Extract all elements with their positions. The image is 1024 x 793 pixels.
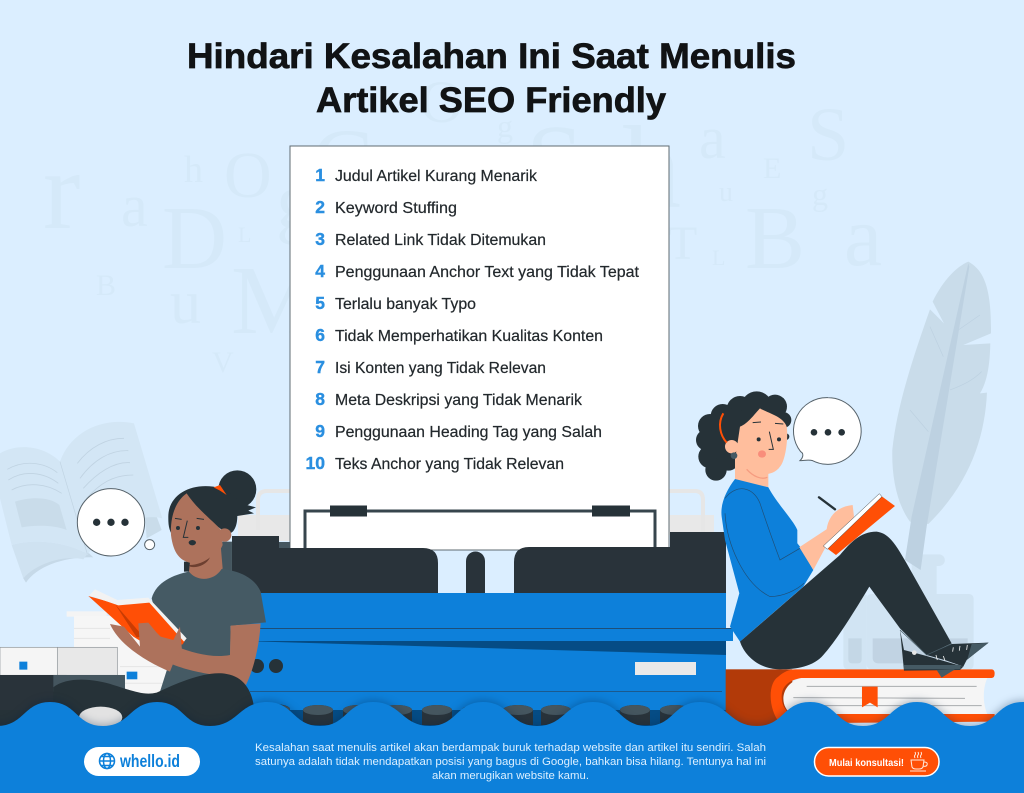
list item 7: Isi Konten yang Tidak Relevan	[335, 360, 546, 377]
hair tie	[720, 413, 727, 443]
sock	[79, 707, 122, 728]
faded serif letters: u	[170, 269, 201, 337]
footer paragraph: satunya adalah tidak mendapatkan posisi yang bagus di Google, bahkan bisa hilang. Tentunya hal ini	[255, 756, 766, 768]
face	[735, 408, 787, 474]
icon: globe	[100, 754, 114, 768]
faded serif letters: S	[526, 104, 584, 219]
list item 2: 2	[315, 197, 325, 217]
shirt	[152, 569, 266, 692]
paper panel with list	[290, 146, 669, 550]
title: Hindari Kesalahan Ini Saat Menulis	[187, 37, 796, 76]
right woman writing	[696, 391, 895, 642]
list item 3: 3	[315, 229, 325, 249]
list item 9: Penggunaan Heading Tag yang Salah	[335, 424, 602, 441]
background feather	[892, 262, 991, 570]
right woman legs and shoes	[740, 532, 989, 678]
faded serif letters: g	[276, 158, 316, 246]
list item 6: 6	[315, 325, 325, 345]
papers and books stack left	[0, 611, 169, 728]
faded serif letters: B	[745, 189, 805, 288]
list item 9: 9	[315, 421, 325, 441]
faded serif letters: S	[807, 93, 849, 177]
book stack under right woman	[726, 669, 995, 726]
keys band	[250, 710, 726, 732]
list item 1: Judul Artikel Kurang Menarik	[335, 168, 537, 185]
arm and hand	[799, 505, 854, 570]
faded serif letters: O	[224, 139, 272, 212]
face details	[189, 557, 210, 567]
faded serif letters: E	[763, 152, 781, 185]
pencil	[819, 497, 835, 509]
typewriter	[232, 506, 733, 732]
list item 8: Meta Deskripsi yang Tidak Menarik	[335, 392, 582, 409]
blue shirt	[721, 479, 813, 642]
left thought bubble	[77, 489, 155, 556]
faded serif letters: B	[96, 269, 116, 302]
typewriter back handle	[238, 491, 714, 541]
list item 3: Related Link Tidak Ditemukan	[335, 232, 546, 249]
face details	[753, 422, 783, 449]
knob dots	[250, 659, 283, 673]
background open book	[0, 422, 162, 583]
notebook	[824, 495, 895, 555]
faded serif letters: M	[231, 247, 318, 355]
logo text: whello.id	[119, 751, 180, 771]
list item 10: Teks Anchor yang Tidak Relevan	[335, 456, 564, 473]
curly hair	[696, 391, 791, 481]
shoes	[927, 643, 989, 667]
footer paragraph	[255, 742, 766, 782]
faded serif letters: D	[162, 189, 227, 288]
footer paragraph: akan merugikan website kamu.	[432, 770, 589, 782]
list item 4: Penggunaan Anchor Text yang Tidak Tepat	[335, 264, 640, 281]
left woman reading	[0, 470, 266, 728]
face	[171, 493, 223, 564]
open orange book	[88, 596, 185, 649]
faded serif letters: a	[699, 105, 726, 171]
faded serif letters: L	[238, 222, 251, 247]
faded serif letters: a	[121, 173, 148, 239]
background glass jar	[843, 554, 974, 669]
title	[187, 37, 796, 120]
faded serif letters: g	[812, 176, 828, 212]
typewriter blue body	[240, 593, 726, 728]
faded serif letters: C	[312, 110, 373, 212]
faded serif letters: h	[622, 102, 681, 233]
logo pill	[84, 747, 200, 776]
right speech bubble	[793, 398, 861, 464]
hands	[110, 623, 182, 672]
faded serif letters: V	[212, 346, 234, 379]
keys	[258, 704, 690, 725]
earring	[731, 452, 737, 459]
list item 1: 1	[315, 165, 325, 185]
legs	[0, 673, 254, 728]
chair strip	[220, 542, 232, 572]
call to action button	[814, 748, 939, 776]
arm	[153, 623, 261, 685]
neck	[735, 457, 768, 487]
paper holder	[305, 511, 655, 549]
faded serif letters: L	[712, 245, 725, 270]
title: Artikel SEO Friendly	[316, 81, 667, 120]
hair tie	[214, 485, 227, 495]
faded serif letters: h	[184, 149, 203, 191]
faded serif letters	[43, 69, 882, 379]
list item 2: Keyword Stuffing	[335, 200, 457, 217]
footer paragraph: Kesalahan saat menulis artikel akan berdampak buruk terhadap website dan artikel itu sendiri. Salah	[255, 742, 766, 754]
shirt seams	[725, 489, 804, 597]
faded serif letters: r	[43, 129, 80, 253]
hair bun	[218, 470, 256, 508]
list item 5: 5	[315, 293, 325, 313]
faded serif letters: T	[668, 217, 697, 270]
hair	[184, 562, 192, 572]
faded serif letters: O	[420, 69, 463, 135]
faded serif letters: u	[719, 177, 733, 208]
list item 4: 4	[315, 261, 325, 281]
list item 10: 10	[306, 453, 325, 473]
icon: coffee cup	[910, 752, 927, 771]
bookmark	[862, 687, 878, 707]
footer wave band	[0, 702, 1024, 793]
typewriter dark top	[232, 536, 438, 593]
list item 6: Tidak Memperhatikan Kualitas Konten	[335, 328, 603, 345]
button label: Mulai konsultasi!	[829, 757, 904, 769]
list item 5: Terlalu banyak Typo	[335, 296, 476, 313]
list item 7: 7	[315, 357, 325, 377]
faded serif letters: a	[844, 188, 882, 284]
list item 8: 8	[315, 389, 325, 409]
neck	[189, 545, 223, 580]
faded serif letters: g	[497, 108, 513, 144]
